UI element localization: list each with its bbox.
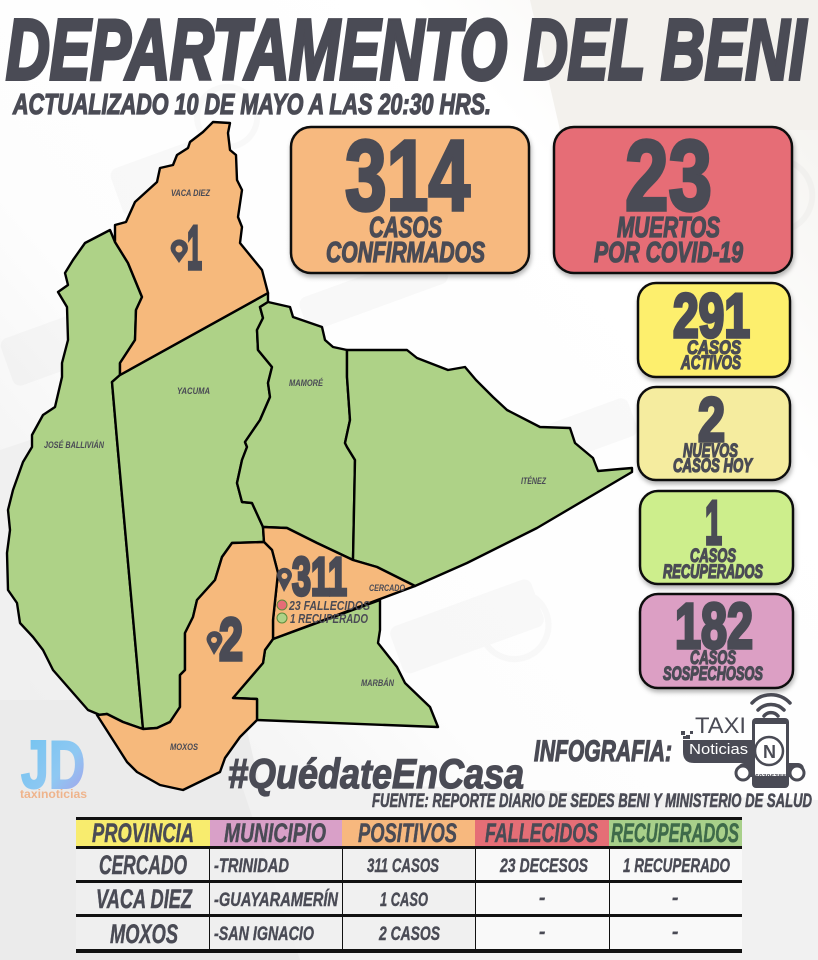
row: Moxos: MOXOS bbox=[110, 919, 178, 949]
panel: casos activos: 291 bbox=[673, 282, 750, 351]
logo: Taxi Noticias: 69396388 bbox=[755, 774, 786, 780]
panel: casos recuperados: 1 bbox=[705, 489, 722, 558]
panel: muertos: 23 bbox=[625, 120, 712, 232]
table header bbox=[76, 818, 742, 848]
row: Vaca Diez bbox=[96, 884, 678, 914]
label: Moxos: MOXOS bbox=[170, 742, 198, 752]
logo: Taxi Noticias: TAXI bbox=[695, 713, 746, 738]
icon: wifi arcs bbox=[752, 695, 790, 716]
label: José Ballivián: JOSÉ BALLIVIÁN bbox=[44, 440, 104, 450]
map of Beni provinces: 1 bbox=[187, 214, 202, 283]
region: Iténez bbox=[345, 350, 632, 586]
region: Mamoré bbox=[237, 302, 355, 560]
label: Vaca Diez: VACA DIEZ bbox=[171, 188, 210, 198]
logo: Taxi Noticias: N bbox=[763, 742, 776, 762]
table: cases by province bbox=[76, 817, 742, 953]
region: Vaca Díez bbox=[115, 122, 268, 375]
region: Moxos bbox=[97, 542, 278, 790]
logo: JD taxinoticias: JD bbox=[21, 727, 85, 803]
row: Cercado bbox=[99, 850, 730, 880]
region: Marbán bbox=[233, 600, 438, 727]
panel: nuevos casos hoy bbox=[638, 386, 790, 480]
row: Moxos: -SAN IGNACIO bbox=[214, 924, 314, 945]
panel: casos activos: CASOS bbox=[687, 338, 741, 359]
marker: Cercado count: 311 bbox=[292, 547, 347, 607]
marker: Moxos count: 2 bbox=[219, 606, 243, 673]
infografia credit: INFOGRAFIA: bbox=[534, 735, 672, 768]
row: Cercado: CERCADO bbox=[99, 850, 187, 880]
panel: nuevos casos hoy: CASOS HOY bbox=[673, 456, 754, 477]
panel: muertos: POR COVID-19 bbox=[594, 237, 743, 269]
marker: Vaca Diez count bbox=[171, 214, 202, 283]
row: Vaca Diez: 1 CASO bbox=[380, 890, 428, 911]
table header: PROVINCIA bbox=[92, 818, 194, 848]
label: Cercado: CERCADO bbox=[369, 583, 405, 593]
marker: Cercado count bbox=[277, 547, 347, 607]
logo: JD taxinoticias: taxinoticias bbox=[20, 787, 87, 801]
row: Moxos: - bbox=[672, 922, 678, 943]
row: Cercado: -TRINIDAD bbox=[214, 856, 289, 877]
map of Beni provinces bbox=[7, 122, 632, 790]
panel: casos confirmados bbox=[291, 120, 529, 273]
row: Moxos bbox=[110, 919, 678, 949]
region: Cercado bbox=[263, 527, 415, 639]
table header: FALLECIDOS bbox=[485, 818, 598, 848]
panel: nuevos casos hoy: NUEVOS bbox=[683, 441, 738, 462]
panel: casos sospechosos: CASOS bbox=[690, 648, 736, 669]
logo: Taxi Noticias bbox=[681, 695, 804, 788]
row: Vaca Diez: - bbox=[672, 888, 678, 909]
row: Cercado: 23 DECESOS bbox=[499, 856, 588, 877]
panel: casos sospechosos bbox=[640, 590, 793, 688]
panel: nuevos casos hoy: 2 bbox=[698, 386, 725, 455]
marker: Moxos count bbox=[206, 606, 243, 673]
panel: casos confirmados: CONFIRMADOS bbox=[326, 237, 485, 269]
table header: POSITIVOS bbox=[358, 818, 457, 848]
panel: casos confirmados: CASOS bbox=[369, 212, 442, 244]
panel: casos activos: ACTIVOS bbox=[680, 353, 741, 374]
row: Vaca Diez: -GUAYARAMERÍN bbox=[214, 889, 339, 911]
panel: casos activos bbox=[638, 282, 790, 377]
region: José Ballivián bbox=[7, 230, 143, 729]
panel: casos sospechosos: SOSPECHOSOS bbox=[663, 664, 763, 685]
logo: Taxi Noticias: Noticias bbox=[689, 741, 748, 758]
marker: Cercado fallecidos: 23 FALLECIDOS bbox=[288, 598, 370, 613]
region: Yacuma bbox=[112, 293, 272, 729]
marker: Cercado recuperado: 1 RECUPERADO bbox=[290, 611, 368, 626]
label: Mamoré: MAMORÉ bbox=[289, 378, 324, 388]
label: Yacuma: YACUMA bbox=[177, 386, 210, 396]
row: Vaca Diez: - bbox=[539, 888, 545, 909]
panel: muertos bbox=[554, 120, 792, 273]
subtitle: update date: ACTUALIZADO 10 DE MAYO A LAS 20:30 HRS. bbox=[12, 89, 491, 121]
row: Cercado: 1 RECUPERADO bbox=[623, 856, 730, 877]
panel: casos confirmados: 314 bbox=[345, 120, 470, 232]
panel: casos recuperados: RECUPERADOS bbox=[663, 562, 763, 583]
label: Marbán: MARBÁN bbox=[361, 678, 394, 688]
table header: MUNICIPIO bbox=[224, 818, 326, 848]
marker: Cercado recuperado bbox=[277, 611, 368, 626]
row: Cercado: 311 CASOS bbox=[367, 856, 439, 877]
hashtag: #QuédateEnCasa bbox=[228, 750, 524, 798]
row: Moxos: - bbox=[539, 922, 545, 943]
row: Moxos: 2 CASOS bbox=[378, 924, 440, 945]
panel: muertos: MUERTOS bbox=[617, 212, 720, 244]
label: Iténez: ITÉNEZ bbox=[521, 476, 546, 486]
table header: RECUPERADOS bbox=[611, 818, 739, 848]
panel: casos recuperados: CASOS bbox=[690, 546, 736, 567]
panel: casos recuperados bbox=[640, 489, 793, 584]
row: Vaca Diez: VACA DIEZ bbox=[96, 884, 193, 914]
panel: casos sospechosos: 182 bbox=[675, 590, 753, 662]
